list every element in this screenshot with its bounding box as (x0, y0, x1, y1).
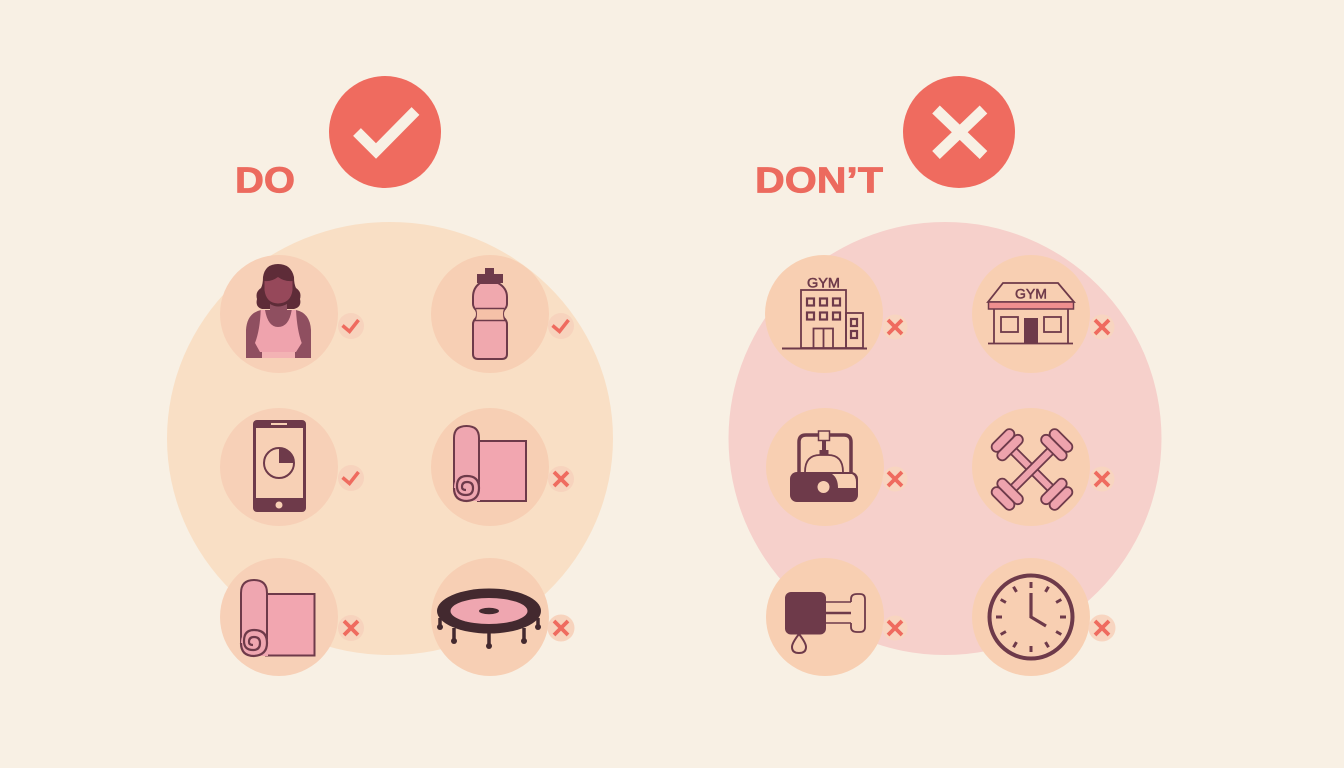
item: dripping dumbbell (766, 558, 884, 676)
badge: check (338, 313, 364, 339)
item: gym machine (766, 408, 884, 526)
badge: check (338, 465, 364, 491)
badge: cross (882, 616, 908, 640)
badge: cross (1090, 314, 1114, 340)
item: woman in sports top (220, 255, 338, 373)
icon: large cross (903, 76, 1015, 188)
item: wall clock (972, 558, 1090, 676)
panel: do (167, 76, 613, 676)
do panel background circle (167, 222, 613, 655)
icon: large check mark (329, 76, 441, 188)
item: smartphone with pie chart (220, 408, 338, 526)
heading: DO: DO (235, 160, 295, 200)
badge: cross (882, 466, 908, 492)
badge: check (548, 313, 574, 339)
badge: cross (1090, 466, 1114, 492)
panel: don't (728, 76, 1162, 676)
badge: cross (548, 614, 574, 642)
heading: DON'T: DON’T (755, 160, 883, 200)
badge: cross (1088, 614, 1116, 642)
badge: cross (882, 314, 908, 340)
item: rolled exercise mat (431, 408, 549, 526)
badge: cross (338, 615, 364, 641)
item: rolled exercise mat (220, 558, 338, 676)
item: gym building (765, 255, 883, 373)
item: crossed dumbbells (972, 408, 1090, 526)
item: gym storefront: GYM (1015, 286, 1047, 301)
don't panel background circle (728, 222, 1162, 655)
item: water bottle (431, 255, 549, 373)
item: gym building: GYM (807, 275, 840, 290)
item: gym storefront (972, 255, 1090, 373)
item: mini trampoline (431, 558, 549, 676)
badge: cross (548, 466, 574, 492)
